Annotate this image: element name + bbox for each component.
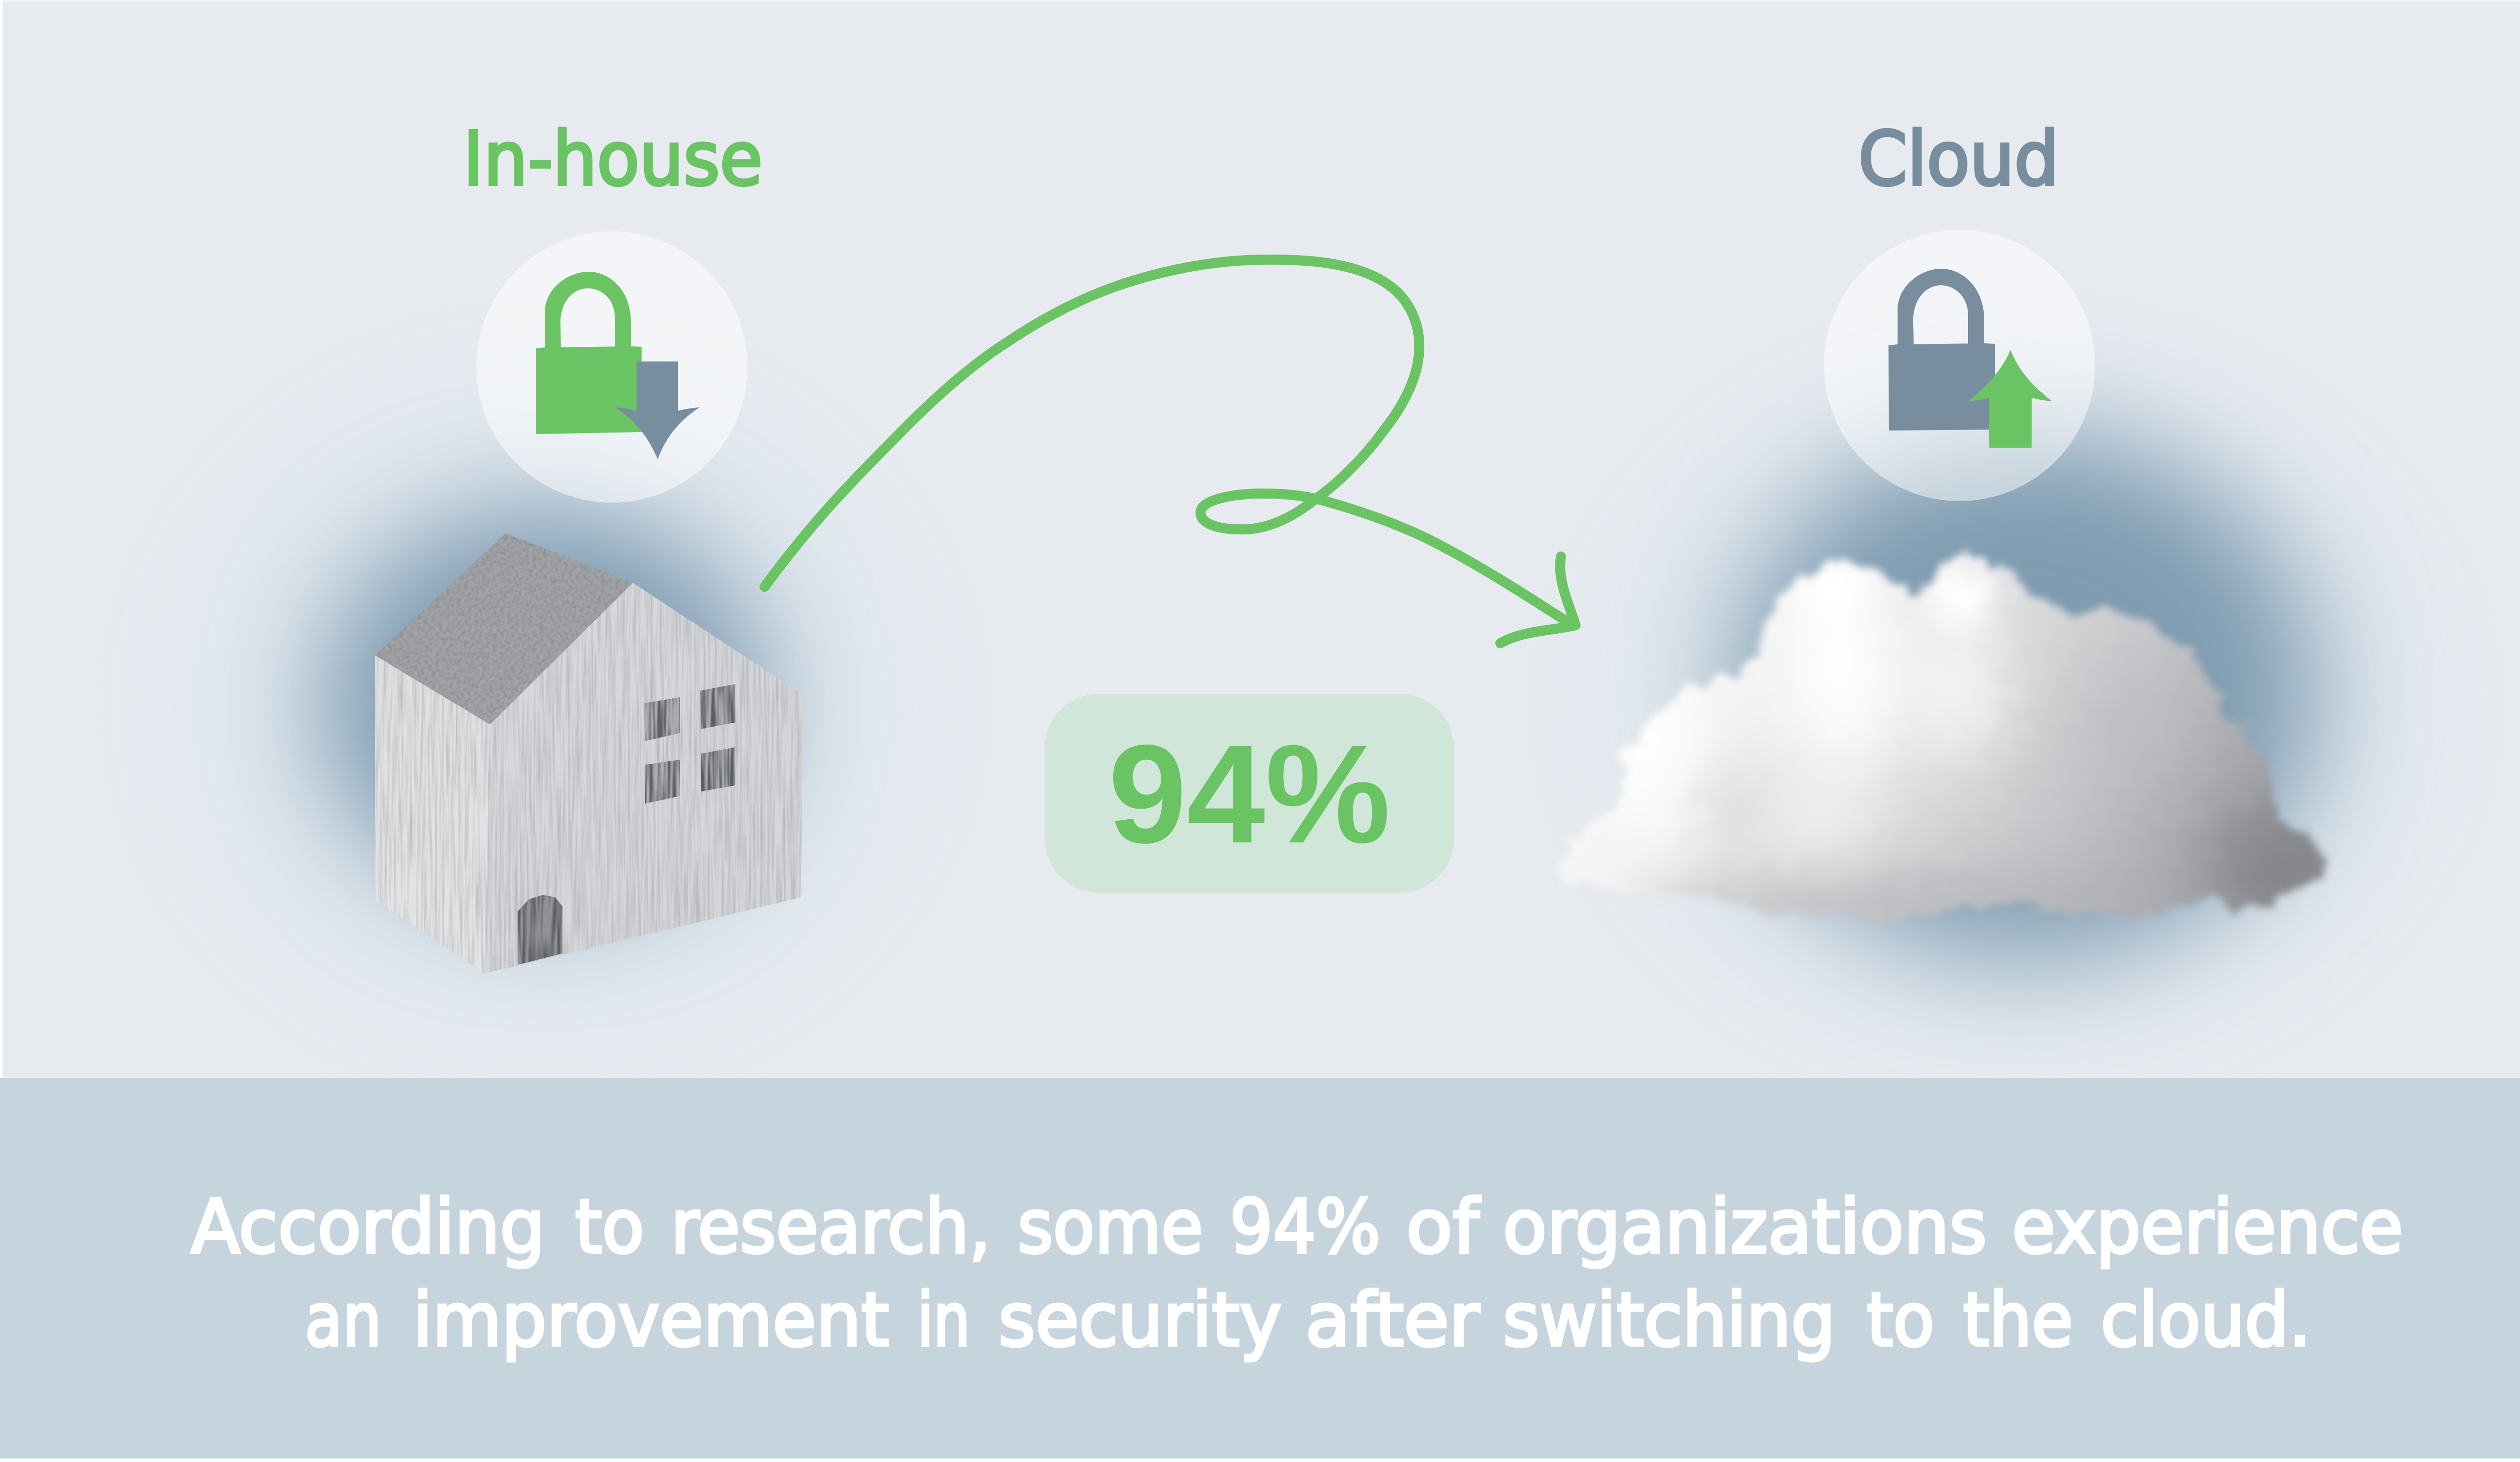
caption text: cloud.	[2101, 1277, 2311, 1363]
caption text: after	[1305, 1277, 1480, 1363]
caption text	[191, 1184, 2403, 1363]
stat pill: 94%	[1045, 694, 1454, 893]
caption text: improvement	[413, 1277, 889, 1363]
caption text: an	[305, 1277, 382, 1363]
illustration: cloud	[1552, 551, 2339, 933]
caption text: to	[575, 1184, 644, 1270]
illustration: wooden house	[375, 533, 802, 973]
caption text: experience	[2012, 1184, 2403, 1270]
caption text: some	[1018, 1184, 1203, 1270]
stat pill: 94%: 94%	[1108, 715, 1391, 872]
caption text: in	[917, 1277, 970, 1363]
caption text: the	[1963, 1277, 2073, 1363]
caption text: According	[191, 1184, 545, 1270]
wide pale halos behind house and cloud	[181, 373, 2419, 1039]
caption text: of	[1406, 1184, 1481, 1270]
caption text: 94%	[1230, 1184, 1380, 1270]
icon: in-house lock with download arrow	[476, 231, 747, 503]
arrow: hand-drawn curved arrow from house to cloud	[765, 260, 1576, 643]
glow behind cloud	[1734, 434, 2318, 958]
icon: cloud lock with upload arrow	[1824, 230, 2095, 501]
caption text: organizations	[1503, 1184, 1987, 1270]
caption text: switching	[1503, 1277, 1836, 1363]
glow behind house	[323, 509, 766, 902]
caption text: security	[998, 1277, 1282, 1363]
heading: In-house: In-house	[463, 116, 763, 202]
caption text: to	[1867, 1277, 1934, 1363]
caption text: research,	[671, 1184, 991, 1270]
page background	[3, 1, 2520, 1078]
bottom caption band background	[0, 1078, 2520, 1458]
heading: Cloud: Cloud	[1858, 116, 2059, 202]
